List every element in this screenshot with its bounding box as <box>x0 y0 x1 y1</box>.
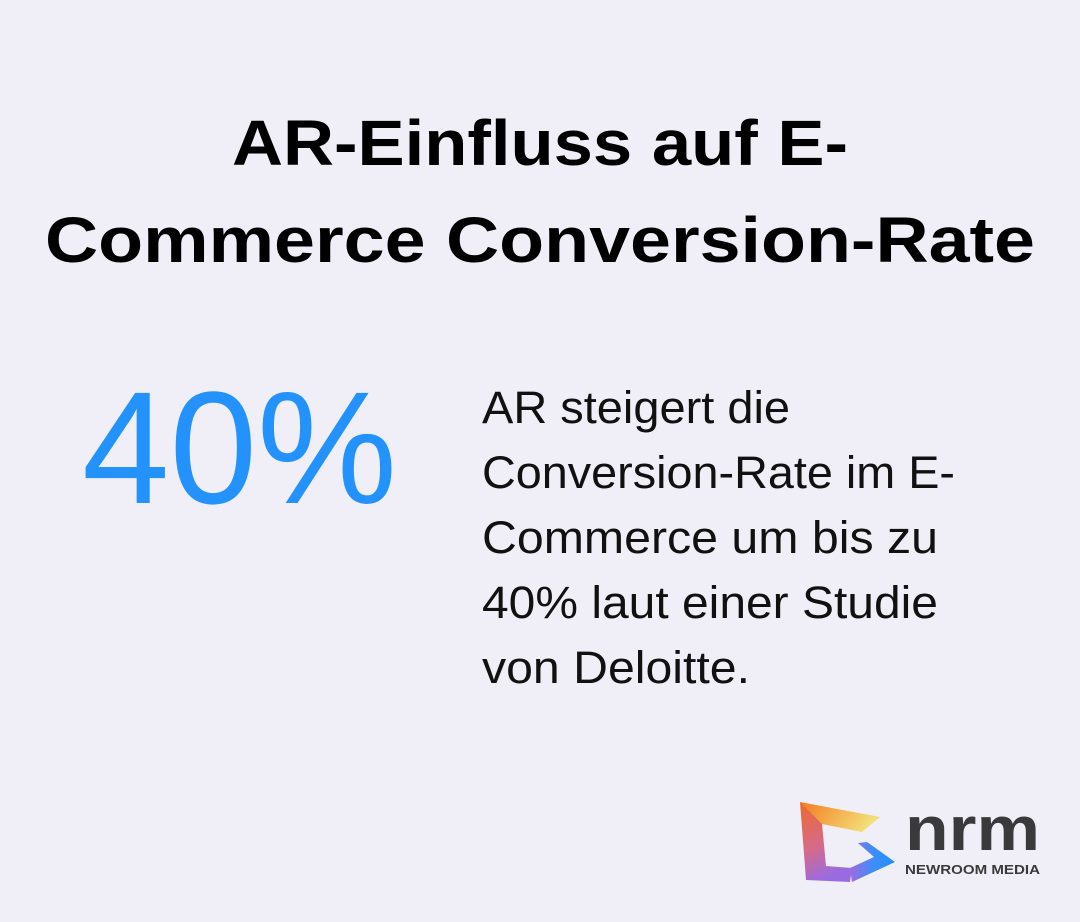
logo text: nrm <box>905 795 1040 864</box>
title <box>45 107 1035 276</box>
title: Commerce Conversion-Rate <box>45 204 1035 276</box>
icon: logo mark <box>800 802 895 882</box>
title: AR-Einfluss auf E- <box>232 107 848 179</box>
description text: AR steigert die <box>482 382 790 433</box>
logo: newroom media <box>800 795 1041 882</box>
description text: 40% laut einer Studie <box>482 577 938 628</box>
description text: Commerce um bis zu <box>482 512 938 563</box>
logo text: NEWROOM MEDIA <box>905 862 1041 877</box>
description text: von Deloitte. <box>482 642 750 693</box>
big stat: 40%: 40% <box>82 358 397 537</box>
description text <box>482 382 955 693</box>
description text: Conversion-Rate im E- <box>482 447 955 498</box>
